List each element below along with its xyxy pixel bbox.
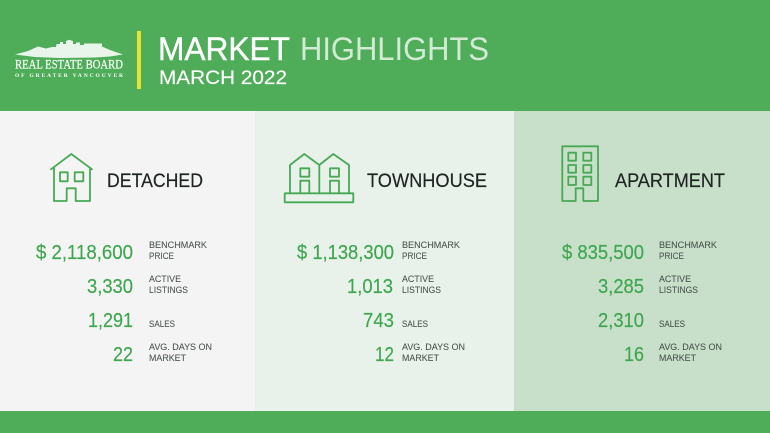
stat: benchmark price — [562, 240, 718, 264]
stat: active listings: LISTINGS — [659, 285, 698, 296]
stat: sales — [363, 309, 428, 332]
stat: average days on market — [113, 342, 212, 366]
icon: apartment building — [562, 146, 598, 201]
stat: benchmark price: PRICE — [149, 251, 174, 262]
panel: detached background — [0, 111, 255, 411]
stat: active listings: ACTIVE — [402, 274, 434, 285]
icon: townhouses — [285, 154, 353, 202]
stat: average days on market: 16 — [624, 343, 644, 366]
stat: sales — [88, 309, 175, 332]
logo skyline — [15, 40, 123, 58]
stat: sales: SALES — [659, 319, 685, 330]
stat: sales: SALES — [402, 319, 428, 330]
stat: active listings: 1,013 — [347, 275, 393, 298]
stat: benchmark price: $ 2,118,600 — [36, 241, 133, 264]
header band — [0, 0, 770, 111]
title: MARKET — [158, 31, 290, 67]
title — [158, 31, 489, 67]
title: HIGHLIGHTS — [300, 31, 489, 67]
stat: active listings — [347, 274, 441, 298]
panel: apartment background — [514, 111, 770, 411]
stat: active listings: 3,330 — [87, 275, 133, 298]
stat: average days on market — [624, 342, 722, 366]
stat: sales: SALES — [149, 319, 175, 330]
stat: benchmark price: $ 835,500 — [562, 241, 644, 264]
panel: detached — [36, 154, 212, 366]
stat: active listings: ACTIVE — [149, 274, 181, 285]
panel: apartment — [562, 146, 725, 366]
stat: benchmark price: BENCHMARK — [149, 240, 208, 251]
stat: average days on market: MARKET — [149, 353, 186, 364]
stat: average days on market: MARKET — [402, 353, 439, 364]
stat: average days on market: AVG. DAYS ON — [659, 342, 722, 353]
subtitle: MARCH 2022 — [159, 68, 287, 89]
stat: sales: 743 — [363, 309, 394, 332]
logo subtitle: OF GREATER VANCOUVER — [15, 73, 124, 79]
stat: benchmark price: PRICE — [402, 251, 427, 262]
stat: average days on market: 12 — [375, 343, 394, 366]
icon: house — [51, 154, 92, 201]
stat: benchmark price: $ 1,138,300 — [297, 241, 394, 264]
stat: sales — [598, 309, 685, 332]
stat: average days on market: MARKET — [659, 353, 696, 364]
panel: townhouse background — [255, 111, 514, 411]
stat: benchmark price: BENCHMARK — [402, 240, 461, 251]
stat: active listings: LISTINGS — [149, 285, 188, 296]
stat: average days on market: 22 — [113, 343, 133, 366]
stat: benchmark price: PRICE — [659, 251, 684, 262]
stat: benchmark price — [297, 240, 461, 264]
panel: townhouse — [285, 154, 487, 366]
stat: sales: 2,310 — [598, 309, 644, 332]
stat: benchmark price — [36, 240, 208, 264]
stat: average days on market: AVG. DAYS ON — [149, 342, 212, 353]
stat: active listings — [598, 274, 698, 298]
stat: active listings — [87, 274, 188, 298]
stat: sales: 1,291 — [88, 309, 133, 332]
stat: average days on market: AVG. DAYS ON — [402, 342, 465, 353]
stat: active listings: ACTIVE — [659, 274, 691, 285]
stat: benchmark price: BENCHMARK — [659, 240, 718, 251]
yellow divider bar — [137, 31, 141, 89]
logo: Real Estate Board of Greater Vancouver — [15, 40, 124, 79]
heading: apartment: APARTMENT — [615, 171, 725, 192]
footer band — [0, 411, 770, 433]
stat: active listings: LISTINGS — [402, 285, 441, 296]
heading: detached: DETACHED — [107, 171, 203, 192]
heading: townhouse: TOWNHOUSE — [367, 171, 487, 192]
stat: active listings: 3,285 — [598, 275, 644, 298]
logo name: REAL ESTATE BOARD — [15, 58, 123, 72]
stat: average days on market — [375, 342, 465, 366]
